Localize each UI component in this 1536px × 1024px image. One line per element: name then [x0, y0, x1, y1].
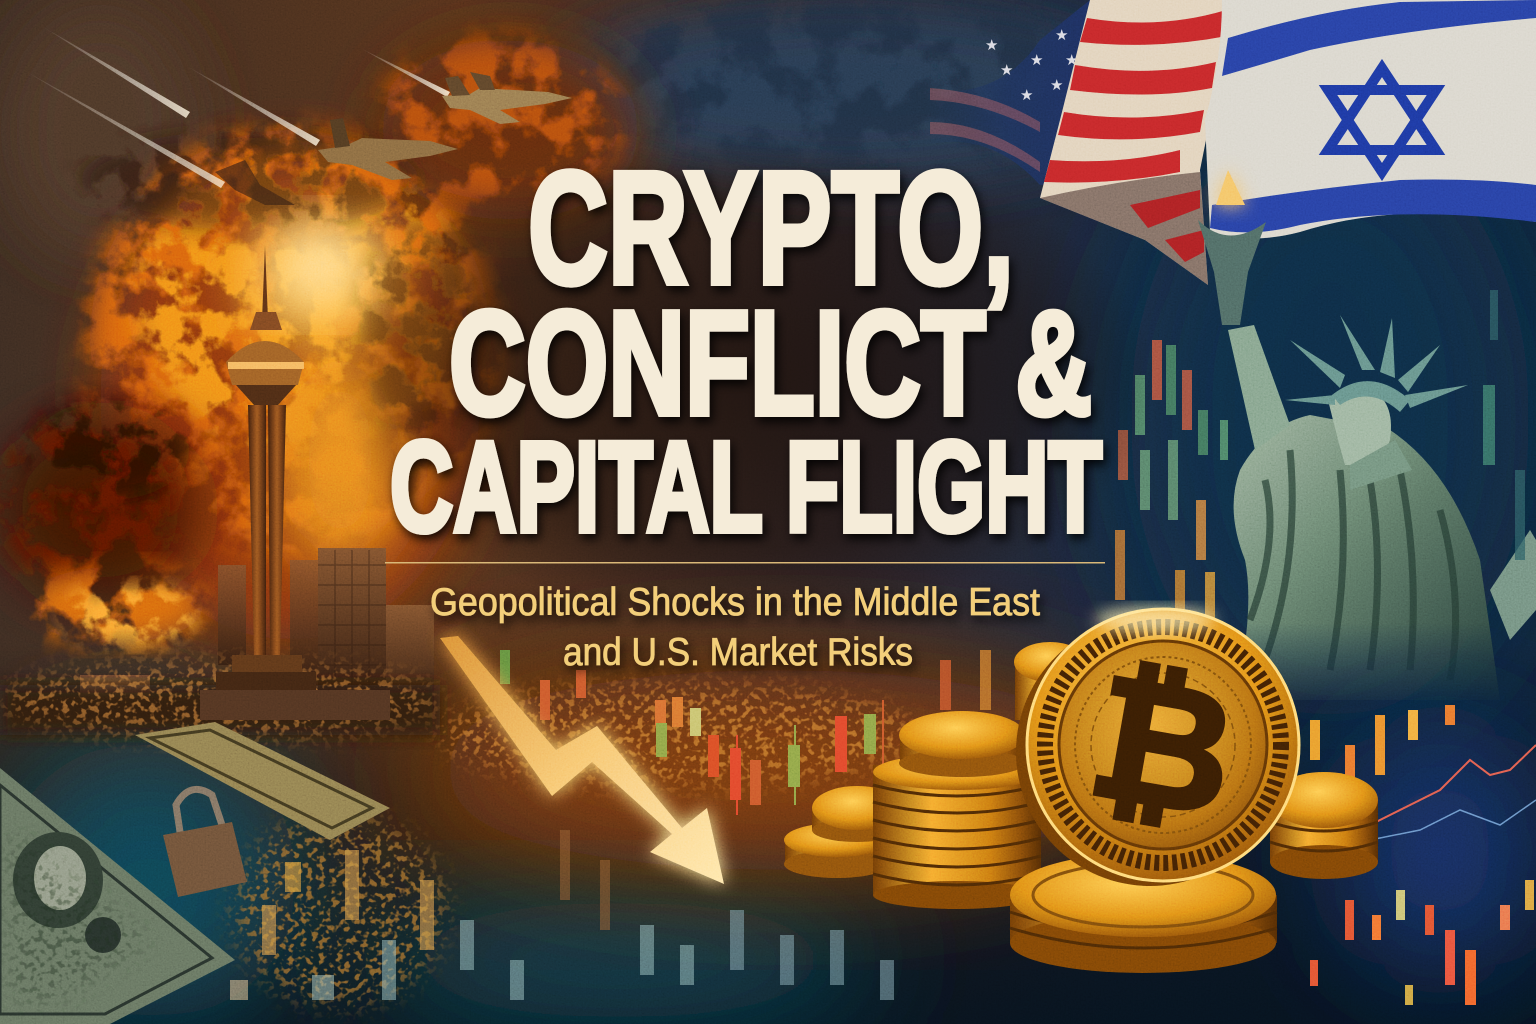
title line 1: CRYPTO, — [528, 138, 1014, 317]
coin stack: front — [1010, 853, 1277, 973]
glow: coin highlight — [1095, 608, 1215, 632]
US dollar bill — [0, 768, 235, 1024]
gold coin stacks — [784, 642, 1378, 973]
subtitle — [430, 581, 1040, 674]
coin stack: small left — [784, 786, 902, 878]
statue tablet — [1490, 530, 1536, 640]
fire and smoke clouds — [0, 40, 640, 643]
tower — [216, 245, 316, 690]
city lights: centre — [440, 685, 920, 785]
line chart — [1370, 745, 1536, 840]
candlesticks: bottom faded — [230, 830, 894, 1000]
statue head — [1328, 388, 1391, 465]
arrow: falling market — [440, 636, 724, 884]
flag stars: ★ — [1030, 52, 1043, 69]
title — [390, 138, 1102, 559]
flag canton — [925, 0, 1090, 185]
bitcoin symbol: ₿ — [1077, 639, 1249, 853]
contrails — [20, 25, 450, 188]
flag stars: ★ — [1050, 77, 1063, 94]
flag stripes — [1040, 0, 1228, 285]
skyline buildings — [0, 548, 440, 738]
candlesticks: right side — [1310, 705, 1534, 1005]
flag band bottom — [1210, 180, 1536, 232]
Statue of Liberty — [1198, 170, 1536, 700]
flag faded stripes — [930, 88, 1040, 172]
second banknote — [135, 722, 390, 840]
flag stars: ★ — [1000, 62, 1013, 79]
subtitle line 2: and U.S. Market Risks — [563, 631, 913, 674]
US flag — [925, 0, 1228, 285]
debris texture: lower left — [235, 815, 445, 1005]
candlesticks: centre lower — [500, 650, 991, 815]
candlesticks: upper right — [1115, 290, 1525, 622]
title backdrop — [335, 140, 1155, 620]
icon: fighter jet upper — [442, 72, 572, 124]
Israeli flag — [1205, 0, 1536, 238]
flag stars: ★ — [1020, 87, 1033, 104]
coin stack: right — [1270, 772, 1378, 879]
icon: distant jet — [215, 160, 295, 205]
flag stars — [985, 27, 1078, 104]
flag stars: ★ — [1065, 52, 1078, 69]
icon: star of David — [1328, 68, 1436, 172]
statue arm — [1228, 325, 1290, 450]
icon: fighter jet lower — [318, 118, 458, 180]
statue torch — [1198, 220, 1266, 325]
divider — [385, 562, 1105, 564]
statue robe — [1234, 415, 1500, 700]
title line 2: CONFLICT & — [449, 281, 1092, 446]
title line 3: CAPITAL FLIGHT — [390, 416, 1102, 559]
statue crown — [1285, 315, 1468, 412]
subtitle line 1: Geopolitical Shocks in the Middle East — [430, 581, 1040, 624]
bitcoin coin — [1016, 609, 1299, 886]
coin stack: middle — [873, 711, 1041, 909]
icon: padlock — [163, 789, 247, 897]
flag stars: ★ — [1055, 27, 1068, 44]
flag band top — [1222, 0, 1536, 76]
coin stack: behind big coin — [1014, 642, 1086, 720]
flag stars: ★ — [985, 37, 998, 54]
